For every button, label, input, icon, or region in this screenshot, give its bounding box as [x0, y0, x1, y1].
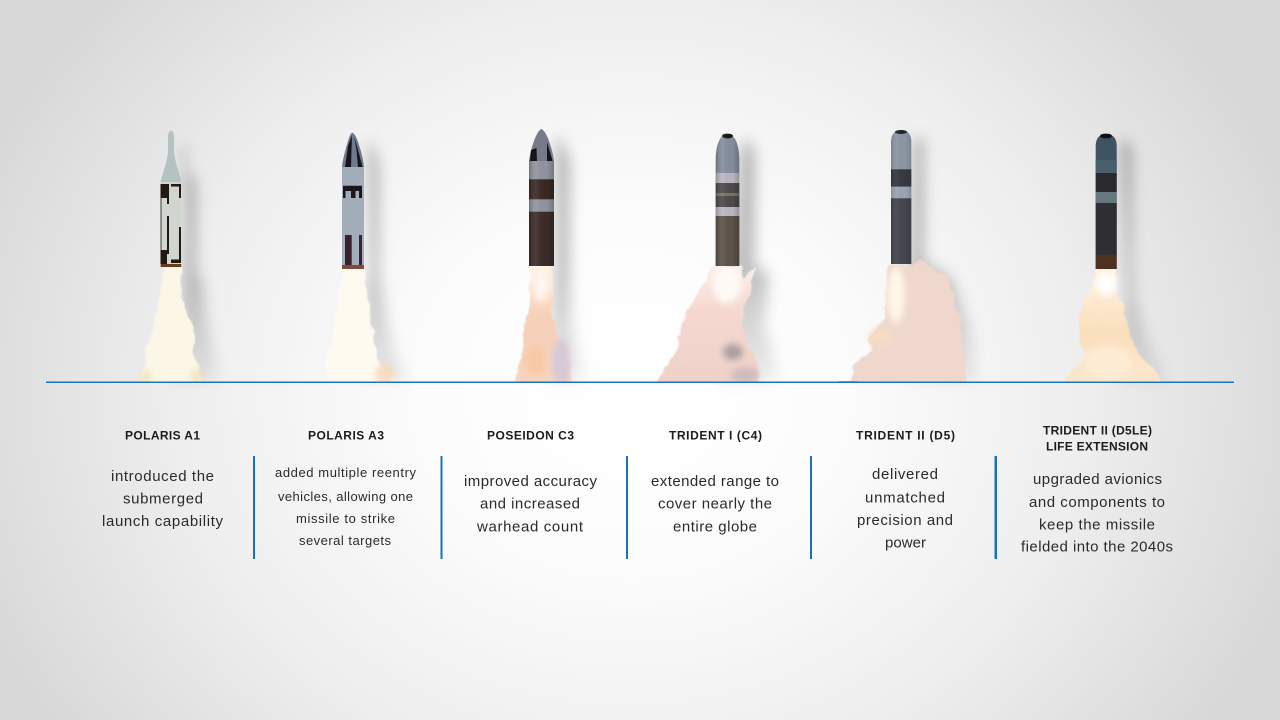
missile: Trident II (D5LE): [1060, 134, 1162, 392]
column: Polaris A3: [275, 428, 416, 548]
description: [857, 466, 953, 552]
column: Polaris A1: [102, 428, 224, 530]
description: power: [885, 535, 926, 552]
heading: POLARIS A1: [125, 428, 200, 442]
description: added multiple reentry: [275, 465, 416, 480]
heading: [1043, 424, 1152, 454]
missile body: [342, 133, 364, 167]
description: improved accuracy: [464, 473, 598, 490]
missile: Polaris A1: [139, 131, 204, 392]
description: precision and: [857, 512, 953, 529]
description: warhead count: [476, 519, 584, 536]
description: extended range to: [651, 473, 779, 490]
missile: Polaris A3: [326, 133, 398, 392]
description: and components to: [1029, 494, 1165, 511]
column: Trident II (D5): [856, 428, 955, 552]
missile body: [891, 130, 911, 264]
missile: Trident II (D5): [838, 130, 968, 392]
description: and increased: [480, 496, 580, 513]
description: upgraded avionics: [1033, 471, 1162, 488]
description: submerged: [123, 491, 203, 508]
heading: TRIDENT II (D5LE): [1043, 424, 1152, 438]
description: [275, 465, 416, 548]
missile body: [161, 131, 181, 266]
baseline: [46, 382, 1234, 383]
missile body: [1096, 134, 1117, 269]
heading: POLARIS A3: [308, 428, 384, 442]
description: introduced the: [111, 468, 214, 485]
description: keep the missile: [1039, 516, 1155, 533]
description: vehicles, allowing one: [278, 489, 413, 504]
missile body: [529, 129, 554, 162]
exhaust plume: [656, 264, 760, 382]
heading: TRIDENT II (D5): [856, 428, 955, 442]
exhaust plume: [326, 268, 398, 392]
description: delivered: [872, 466, 938, 483]
missile: Trident I (C4): [656, 134, 760, 382]
missile shadows: [168, 135, 1169, 382]
description: cover nearly the: [658, 496, 772, 513]
heading: POSEIDON C3: [487, 428, 574, 442]
description: [464, 473, 598, 536]
description: launch capability: [102, 513, 224, 530]
column: Trident II (D5LE) Life Extension: [1021, 424, 1173, 556]
description: [102, 468, 224, 530]
exhaust plume: [850, 260, 968, 392]
heading: TRIDENT I (C4): [669, 428, 762, 442]
description: entire globe: [673, 519, 757, 536]
missile body: [716, 134, 739, 266]
exhaust plume: [1064, 269, 1160, 382]
column: Poseidon C3: [464, 428, 598, 536]
description: fielded into the 2040s: [1021, 539, 1173, 556]
exhaust plume: [514, 266, 572, 382]
description: several targets: [299, 533, 392, 548]
exhaust plume: [139, 267, 204, 392]
heading: LIFE EXTENSION: [1046, 440, 1148, 454]
description: missile to strike: [296, 511, 395, 526]
description: unmatched: [865, 489, 945, 506]
description: [1021, 471, 1173, 556]
description: [651, 473, 779, 536]
missile: Poseidon C3: [513, 129, 573, 392]
column: Trident I (C4): [651, 428, 779, 536]
